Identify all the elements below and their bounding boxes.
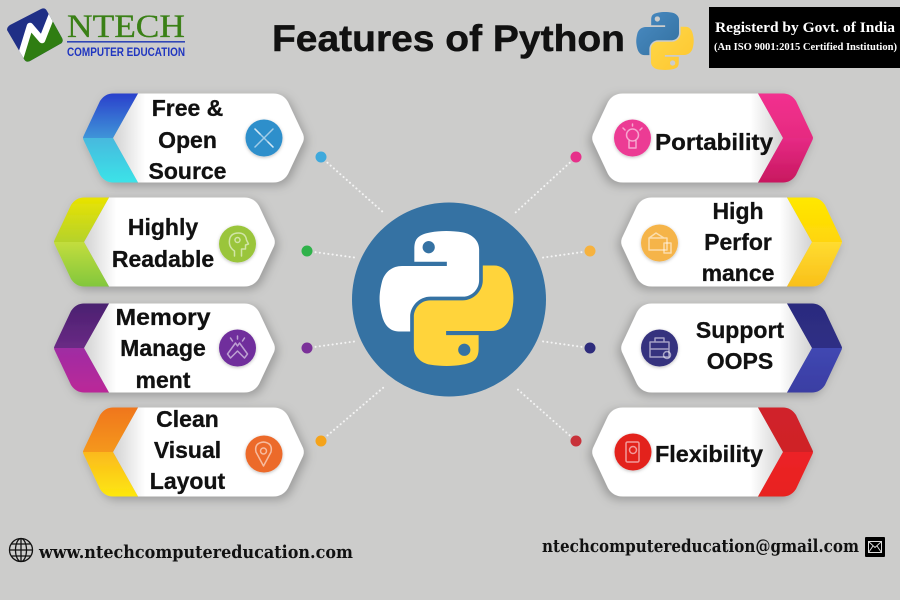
icon: head — [219, 226, 256, 262]
title: Features of Python — [272, 18, 625, 59]
label: Flexibility — [655, 441, 763, 467]
logo tagline: COMPUTER EDUCATION — [67, 47, 185, 59]
logo name: NTECH — [67, 9, 185, 45]
label: Free & — [152, 95, 223, 121]
registration badge — [709, 7, 900, 68]
panel: High Performance — [621, 198, 842, 286]
panel: Highly Readable — [54, 198, 275, 286]
label: Clean — [156, 406, 219, 432]
label — [112, 214, 214, 272]
icon: tools — [246, 120, 282, 156]
label: mance — [702, 260, 774, 286]
panel: Support OOPS — [621, 304, 842, 392]
registration badge: (An ISO 9001:2015 Certified Institution) — [714, 42, 897, 53]
logo mark — [7, 8, 63, 62]
label: Layout — [150, 468, 226, 494]
website address: www.ntechcomputereducation.com — [38, 542, 353, 563]
label: Open — [158, 127, 217, 153]
label: ment — [136, 367, 191, 393]
icon: briefcase — [641, 330, 678, 366]
icon: envelope — [865, 537, 885, 557]
label: Memory — [116, 304, 211, 330]
panel: Free & Open Source — [83, 94, 304, 184]
label — [702, 198, 774, 286]
label — [150, 406, 226, 494]
label — [149, 95, 226, 184]
label: Highly — [128, 214, 198, 240]
logo rule — [67, 41, 185, 43]
icon: hands — [219, 330, 256, 366]
label: Source — [149, 158, 226, 184]
registration badge: Registerd by Govt. of India — [715, 20, 896, 36]
connector lines — [307, 157, 590, 441]
connector dots — [302, 152, 596, 446]
panel: Flexibility — [592, 408, 813, 496]
logo: NTECH Computer Education — [7, 8, 185, 62]
icon: tablet — [614, 434, 652, 470]
label: OOPS — [707, 348, 773, 374]
panel: Memory Management — [54, 304, 275, 393]
icon: python logo small — [636, 12, 694, 70]
label — [116, 304, 211, 393]
label — [696, 317, 784, 374]
central python emblem — [352, 202, 546, 396]
label: Readable — [112, 246, 214, 272]
label: Portability — [655, 129, 773, 155]
icon: light bulb — [614, 120, 651, 156]
icon: wallet — [641, 224, 678, 262]
label: High — [712, 198, 764, 224]
label: Support — [696, 317, 784, 343]
icon: map pin — [246, 436, 282, 472]
panel: Portability — [592, 94, 813, 182]
label: Manage — [120, 335, 206, 361]
panel: Clean Visual Layout — [83, 406, 304, 496]
icon: globe — [10, 538, 32, 562]
label: Perfor — [704, 229, 772, 255]
label: Visual — [154, 437, 221, 463]
